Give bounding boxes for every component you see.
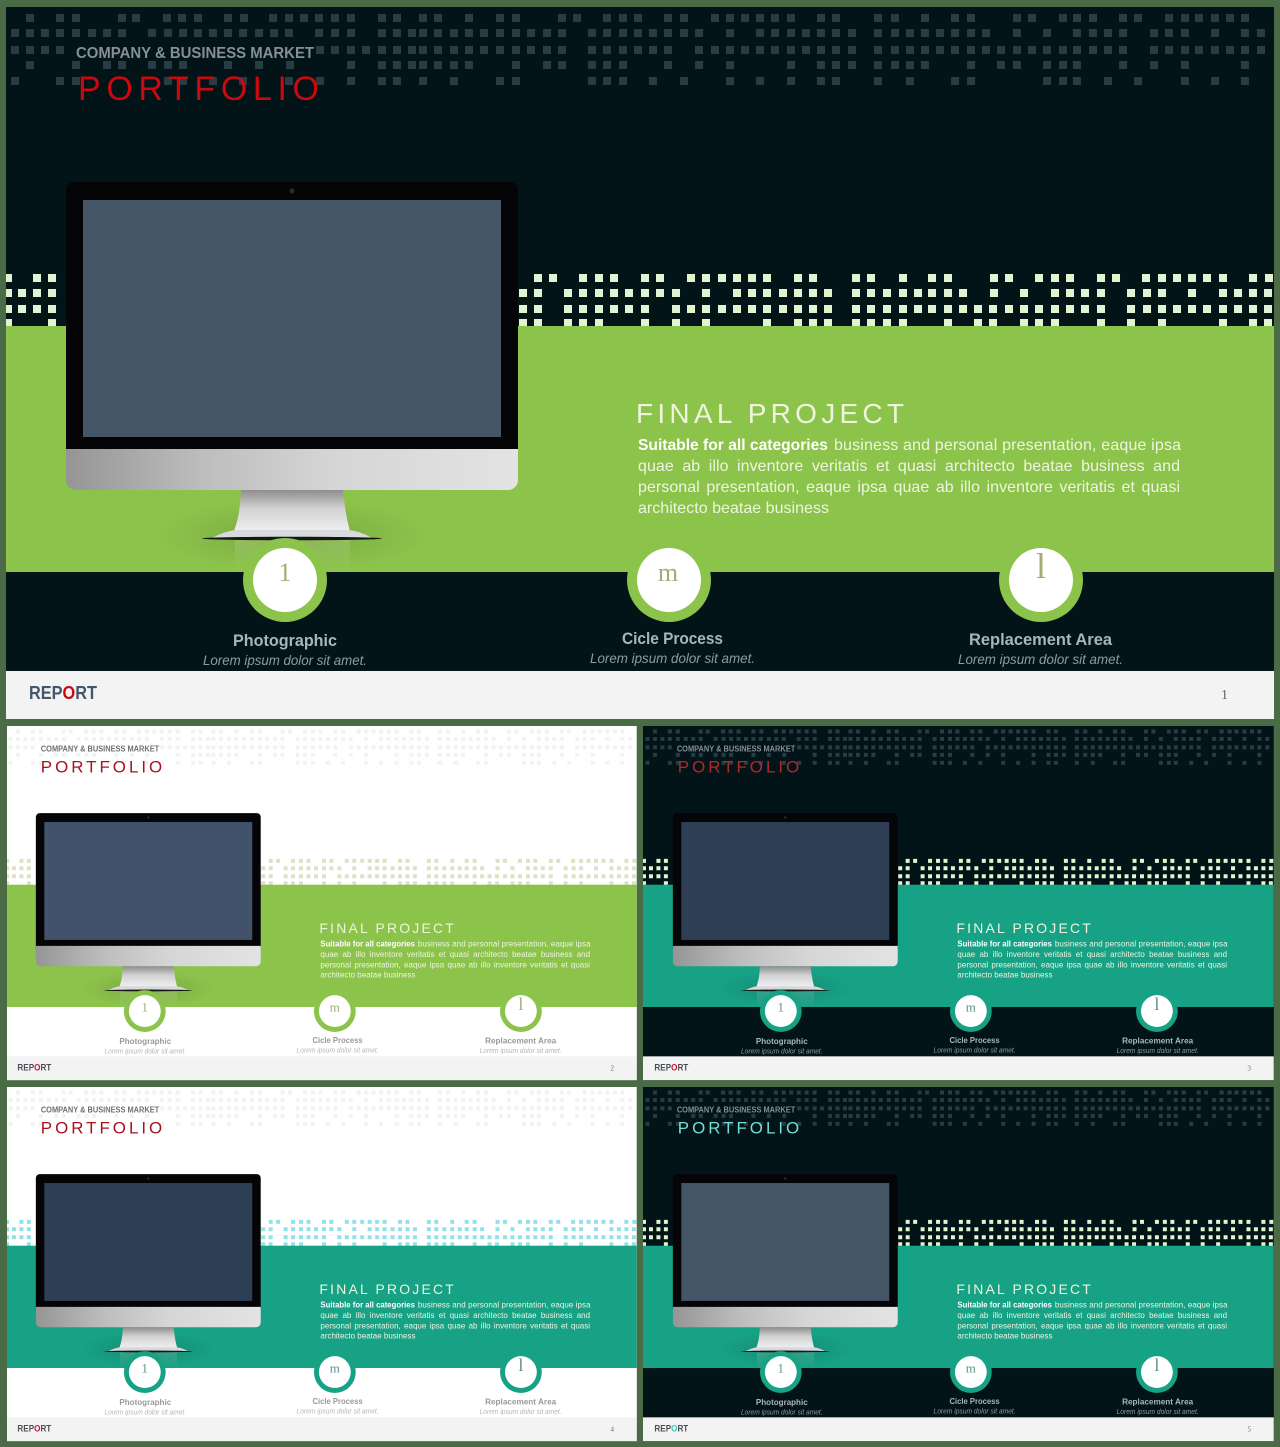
- text block: description: Suitable for all categories: [957, 1300, 1053, 1309]
- label: cicle process: [934, 1035, 1016, 1054]
- text block: description: personal presentation, eaque ipsa quae ab illo inventore veritatis et quasi: [320, 1321, 590, 1330]
- icon: circle 2: m: [658, 558, 678, 587]
- slide background: [6, 1087, 637, 1441]
- top dot pattern: [647, 1092, 1267, 1124]
- label: replacement area: [1117, 1396, 1199, 1416]
- label: cicle process: [934, 1396, 1016, 1415]
- icon: circle 3: l: [518, 1355, 523, 1375]
- label: replacement area: [480, 1396, 562, 1416]
- lower dot pattern: [644, 861, 1271, 883]
- text block: description: architecto beatae business: [638, 500, 829, 517]
- icon: circle 1: 1: [142, 1000, 148, 1015]
- text block: description: business and personal presentation, eaque ipsa: [1055, 939, 1228, 948]
- icon: circle 3: l: [1154, 994, 1159, 1014]
- label: photographic: [104, 1038, 186, 1055]
- icon: circle 1: [760, 1351, 802, 1393]
- footer: page number: 2: [610, 1064, 614, 1072]
- text block: description: business and personal presentation, eaque ipsa: [1055, 1300, 1228, 1309]
- slide background: [6, 726, 637, 1080]
- heading: portfolio: PORTFOLIO: [41, 757, 162, 776]
- label: cicle process: [590, 629, 755, 666]
- label: photographic: Lorem ipsum dolor sit amet.: [741, 1409, 823, 1416]
- heading: portfolio: PORTFOLIO: [78, 70, 319, 108]
- heading: final project: FINAL PROJECT: [956, 920, 1091, 936]
- label: photographic: [741, 1397, 823, 1416]
- icon: circle 2: m: [966, 1361, 976, 1376]
- text block: description: business and personal presentation, eaque ipsa: [418, 939, 591, 948]
- text block: description: architecto beatae business: [320, 1332, 415, 1341]
- text block: description: personal presentation, eaque ipsa quae ab illo inventore veritatis et quasi: [638, 479, 1180, 496]
- heading: portfolio: PORTFOLIO: [41, 1118, 162, 1137]
- icon: monitor: [673, 813, 898, 1007]
- label: cicle process: Cicle Process: [949, 1396, 1000, 1406]
- footer: report: REPORT: [17, 1423, 52, 1433]
- icon: monitor: [673, 1174, 898, 1368]
- colour band: [6, 885, 637, 1007]
- heading: company: COMPANY & BUSINESS MARKET: [41, 1105, 159, 1114]
- label: cicle process: Cicle Process: [622, 629, 723, 648]
- label: replacement area: Replacement Area: [1122, 1035, 1194, 1045]
- text block: description: [320, 939, 591, 980]
- colour band: [643, 1246, 1274, 1368]
- text block: description: architecto beatae business: [957, 1332, 1052, 1341]
- panel: slide 2: [6, 726, 637, 1080]
- label: photographic: Photographic: [119, 1397, 171, 1407]
- footer: page number: 1: [1221, 688, 1228, 703]
- icon: circle 2: [950, 1351, 992, 1393]
- icon: circle 2: [627, 548, 711, 622]
- slide background: [6, 7, 1274, 326]
- footer: report: REPORT: [654, 1062, 689, 1072]
- icon: circle 3: [999, 548, 1083, 622]
- text block: description: quae ab illo inventore veritatis et quasi architecto beatae business and: [957, 1311, 1227, 1320]
- label: photographic: Photographic: [756, 1036, 808, 1046]
- text block: description: [638, 437, 1181, 517]
- label: photographic: Photographic: [119, 1036, 171, 1046]
- icon: circle 2: [314, 1351, 356, 1393]
- label: photographic: [741, 1036, 823, 1055]
- icon: circle 1: 1: [778, 1361, 784, 1376]
- label: cicle process: Lorem ipsum dolor sit amet.: [590, 650, 755, 666]
- text block: description: [957, 939, 1228, 980]
- heading: company: COMPANY & BUSINESS MARKET: [41, 744, 159, 753]
- icon: circle 1: 1: [778, 1000, 784, 1015]
- heading: final project: FINAL PROJECT: [319, 1281, 454, 1297]
- icon: circle 3: [1136, 1351, 1178, 1393]
- lower strip: [6, 1007, 637, 1056]
- label: replacement area: Replacement Area: [969, 630, 1113, 649]
- colour band: [6, 326, 1274, 572]
- text block: description: quae ab illo inventore veritatis et quasi architecto beatae business and: [957, 950, 1227, 959]
- text block: description: personal presentation, eaque ipsa quae ab illo inventore veritatis et quasi: [957, 1321, 1227, 1330]
- footer bar: [6, 1417, 637, 1441]
- lower dot pattern: [644, 1222, 1271, 1244]
- lower dot pattern: [8, 278, 1269, 323]
- label: photographic: Lorem ipsum dolor sit amet.: [741, 1048, 823, 1055]
- slide background: [643, 1087, 1274, 1441]
- label: photographic: [203, 631, 367, 668]
- icon: circle 2: [314, 990, 356, 1032]
- label: replacement area: Replacement Area: [485, 1396, 557, 1406]
- top dot pattern: [15, 18, 1261, 81]
- icon: circle 3: [500, 995, 542, 1032]
- heading: final project: FINAL PROJECT: [956, 1281, 1091, 1297]
- heading: company: COMPANY & BUSINESS MARKET: [76, 45, 314, 62]
- footer bar: [643, 1417, 1274, 1441]
- footer: report: REPORT: [17, 1062, 52, 1072]
- label: cicle process: Cicle Process: [312, 1035, 363, 1045]
- footer: page number: 5: [1247, 1425, 1251, 1433]
- label: replacement area: [480, 1038, 561, 1054]
- icon: circle 3: l: [518, 994, 523, 1014]
- text block: description: quae ab illo inventore veritatis et quasi architecto beatae business and: [320, 1311, 590, 1320]
- label: photographic: Lorem ipsum dolor sit amet.: [105, 1048, 186, 1055]
- label: photographic: [105, 1397, 186, 1416]
- icon: circle 1: [243, 538, 327, 622]
- footer bar: [643, 1056, 1274, 1080]
- heading: portfolio: PORTFOLIO: [678, 757, 799, 776]
- icon: circle 2: [950, 990, 992, 1032]
- label: replacement area: Replacement Area: [485, 1035, 557, 1045]
- heading: final project: FINAL PROJECT: [319, 920, 454, 936]
- label: cicle process: [296, 1037, 378, 1054]
- text block: description: [957, 1300, 1228, 1341]
- text block: description: architecto beatae business: [957, 971, 1052, 980]
- text block: description: quae ab illo inventore veritatis et quasi architecto beatae business and: [320, 950, 590, 959]
- text block: description: Suitable for all categories: [320, 939, 416, 948]
- label: replacement area: Lorem ipsum dolor sit amet.: [1117, 1409, 1199, 1416]
- panel: main slide 1: [6, 7, 1274, 719]
- icon: monitor: [36, 813, 261, 1007]
- label: photographic: Photographic: [233, 631, 337, 650]
- label: cicle process: Lorem ipsum dolor sit amet.: [297, 1408, 379, 1415]
- panel: slide 4: [6, 1087, 637, 1441]
- text block: description: Suitable for all categories: [320, 1300, 416, 1309]
- label: photographic: Lorem ipsum dolor sit amet.: [105, 1409, 186, 1416]
- colour band: [6, 1246, 637, 1368]
- label: cicle process: Lorem ipsum dolor sit amet.: [297, 1047, 379, 1054]
- text block: description: business and personal presentation, eaque ipsa: [418, 1300, 591, 1309]
- label: replacement area: [958, 630, 1123, 667]
- lower dot pattern: [7, 861, 634, 883]
- text block: description: [320, 1300, 591, 1341]
- top dot pattern: [647, 731, 1267, 763]
- icon: circle 1: [124, 1351, 166, 1393]
- icon: circle 1: [760, 990, 802, 1032]
- text block: description: Suitable for all categories: [957, 939, 1053, 948]
- label: cicle process: [297, 1396, 379, 1415]
- icon: circle 2: m: [330, 1000, 340, 1015]
- label: cicle process: Cicle Process: [949, 1035, 1000, 1045]
- footer: report: REPORT: [654, 1423, 689, 1433]
- lower strip: [6, 572, 1274, 671]
- icon: monitor: [36, 1174, 261, 1368]
- icon: circle 1: 1: [142, 1361, 148, 1376]
- label: replacement area: Lorem ipsum dolor sit amet.: [480, 1048, 562, 1055]
- lower strip: [643, 1368, 1274, 1417]
- text block: description: business and personal presentation, eaque ipsa: [834, 437, 1181, 454]
- heading: final project: FINAL PROJECT: [636, 398, 904, 429]
- text block: description: architecto beatae business: [320, 971, 415, 980]
- label: replacement area: Lorem ipsum dolor sit amet.: [958, 651, 1123, 667]
- footer: page number: 4: [610, 1425, 614, 1433]
- text block: description: Suitable for all categories: [638, 437, 828, 454]
- colour band: [643, 885, 1274, 1007]
- label: cicle process: Lorem ipsum dolor sit amet.: [934, 1047, 1016, 1054]
- icon: circle 1: [124, 990, 166, 1032]
- footer bar: [6, 1056, 637, 1080]
- heading: company: COMPANY & BUSINESS MARKET: [677, 744, 795, 753]
- icon: circle 3: [1136, 990, 1178, 1032]
- icon: circle 2: m: [966, 1000, 976, 1015]
- heading: portfolio: PORTFOLIO: [678, 1118, 799, 1137]
- text block: description: personal presentation, eaque ipsa quae ab illo inventore veritatis et quasi: [320, 960, 590, 969]
- icon: circle 3: l: [1154, 1355, 1159, 1375]
- lower strip: [6, 1368, 637, 1417]
- top dot pattern: [10, 1092, 630, 1124]
- lower strip: [643, 1007, 1274, 1056]
- icon: circle 3: [500, 1351, 542, 1393]
- label: replacement area: Replacement Area: [1122, 1396, 1194, 1406]
- panel: slide 3: [643, 726, 1274, 1080]
- icon: monitor: [66, 182, 518, 572]
- footer: report: REPORT: [29, 683, 97, 703]
- heading: company: COMPANY & BUSINESS MARKET: [677, 1105, 795, 1114]
- slide background: [643, 726, 1274, 1080]
- icon: circle 3: l: [1036, 546, 1046, 586]
- label: replacement area: Lorem ipsum dolor sit amet.: [1117, 1048, 1199, 1055]
- panel: slide 5: [643, 1087, 1274, 1441]
- footer bar: [6, 671, 1274, 719]
- top dot pattern: [10, 731, 630, 763]
- footer: page number: 3: [1247, 1064, 1251, 1072]
- label: photographic: Lorem ipsum dolor sit amet.: [203, 652, 367, 668]
- text block: description: personal presentation, eaque ipsa quae ab illo inventore veritatis et quasi: [957, 960, 1227, 969]
- icon: circle 1: 1: [278, 558, 292, 587]
- lower dot pattern: [7, 1222, 634, 1244]
- label: cicle process: Lorem ipsum dolor sit amet.: [934, 1408, 1016, 1415]
- label: photographic: Photographic: [756, 1397, 808, 1407]
- label: replacement area: Lorem ipsum dolor sit amet.: [480, 1409, 562, 1416]
- label: cicle process: Cicle Process: [312, 1396, 363, 1406]
- label: replacement area: [1117, 1035, 1199, 1055]
- icon: circle 2: m: [330, 1361, 340, 1376]
- text block: description: quae ab illo inventore veritatis et quasi architecto beatae business and: [638, 458, 1180, 475]
